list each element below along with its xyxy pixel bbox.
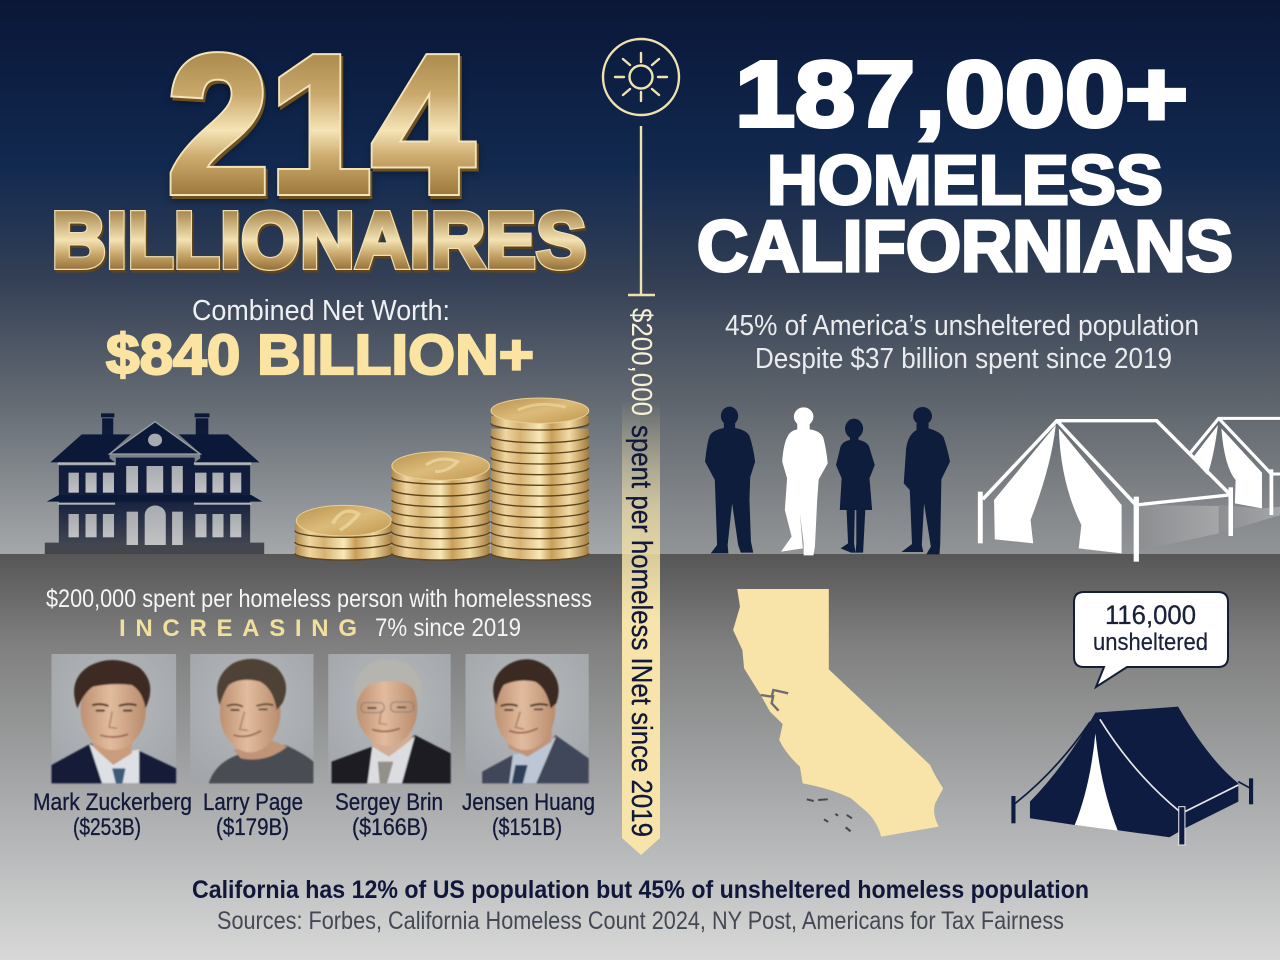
- heading: 214: 214: [168, 19, 475, 238]
- divider line: [628, 126, 655, 295]
- heading: 187,000+: 187,000+: [735, 42, 1188, 146]
- portrait: Larry Page: [190, 654, 313, 783]
- text: bottom takeaway: California has 12% of US population but 45% of unsheltered homeless population: [192, 876, 1089, 904]
- caption: Sergey Brin: Sergey Brin: [335, 789, 443, 816]
- person: navy man right: [901, 407, 950, 554]
- background sky gradient: [0, 0, 1280, 556]
- heading: 214: 214: [169, 18, 476, 237]
- heading: 214: 214: [167, 15, 474, 234]
- portrait: Jensen Huang: [465, 654, 589, 783]
- tent: front: [978, 421, 1233, 562]
- heading: californians: CALIFORNIANS: [697, 207, 1233, 287]
- heading: 214: 214: [167, 15, 474, 234]
- text: combined net worth label: Combined Net Worth:: [192, 295, 450, 327]
- text: unsheltered share: Despite $37 billion spent since 2019: [755, 343, 1172, 375]
- icon: sun: [603, 39, 679, 115]
- portrait captions: [33, 789, 595, 841]
- center vertical arrow banner: $200,000: [625, 308, 657, 416]
- portrait: Sergey Brin: [328, 654, 451, 783]
- portraits row: [51, 654, 589, 783]
- icon: navy tent: [1011, 707, 1253, 845]
- text: increasing label: [119, 614, 521, 642]
- caption: Mark Zuckerberg: ($253B): [73, 814, 141, 841]
- callout: 116,000 unsheltered: 116,000: [1105, 600, 1196, 630]
- caption: Jensen Huang: [462, 789, 595, 841]
- text: sources: Sources: Forbes, California Homeless Count 2024, NY Post, Americans for Tax Fairness: [217, 907, 1064, 935]
- tent: rear: [1189, 418, 1280, 533]
- callout: 116,000 unsheltered: [1074, 592, 1228, 687]
- caption: Sergey Brin: ($166B): [352, 814, 428, 841]
- stack: small: [295, 505, 393, 560]
- caption: Larry Page: [203, 789, 303, 841]
- heading: billionaires: BILLIONAIRES: [52, 196, 586, 284]
- heading: billionaires: BILLIONAIRES: [53, 198, 588, 287]
- caption: Jensen Huang: Jensen Huang: [462, 789, 595, 816]
- text: unsheltered share: [725, 310, 1199, 375]
- caption: Sergey Brin: [335, 789, 443, 841]
- stat: 840 billion: $840 BILLION+: [106, 323, 534, 387]
- text: increasing label: 7% since 2019: [375, 614, 521, 642]
- callout: 116,000 unsheltered: unsheltered: [1093, 629, 1208, 656]
- stack: tall: [491, 398, 589, 560]
- person: navy man: [705, 407, 755, 553]
- portrait: Mark Zuckerberg: [51, 654, 176, 783]
- person: white man: [781, 407, 828, 555]
- caption: Mark Zuckerberg: Mark Zuckerberg: [33, 789, 192, 816]
- center vertical arrow banner: spent per homeless INet since 2019: [625, 425, 657, 837]
- heading: homeless: HOMELESS: [767, 141, 1163, 219]
- stack: medium: [392, 452, 490, 560]
- people silhouettes: [705, 407, 950, 555]
- icon: mansion: [45, 413, 264, 554]
- text: unsheltered share: 45% of America’s unsheltered population: [725, 310, 1199, 342]
- center vertical arrow banner: [622, 308, 660, 855]
- caption: Larry Page: ($179B): [216, 814, 289, 841]
- heading: billionaires: BILLIONAIRES: [52, 196, 586, 284]
- caption: Jensen Huang: ($151B): [492, 814, 562, 841]
- icon: gold coin stacks: [295, 398, 589, 560]
- map: California: [733, 589, 943, 837]
- caption: Mark Zuckerberg: [33, 789, 192, 841]
- caption: Larry Page: Larry Page: [203, 789, 303, 816]
- text: increasing label: INCREASING: [119, 615, 357, 642]
- person: navy woman: [836, 419, 875, 553]
- icon: white tents: [978, 418, 1280, 562]
- ground band: [0, 554, 1280, 960]
- text: spending per person: $200,000 spent per homeless person with homelessness: [46, 585, 592, 613]
